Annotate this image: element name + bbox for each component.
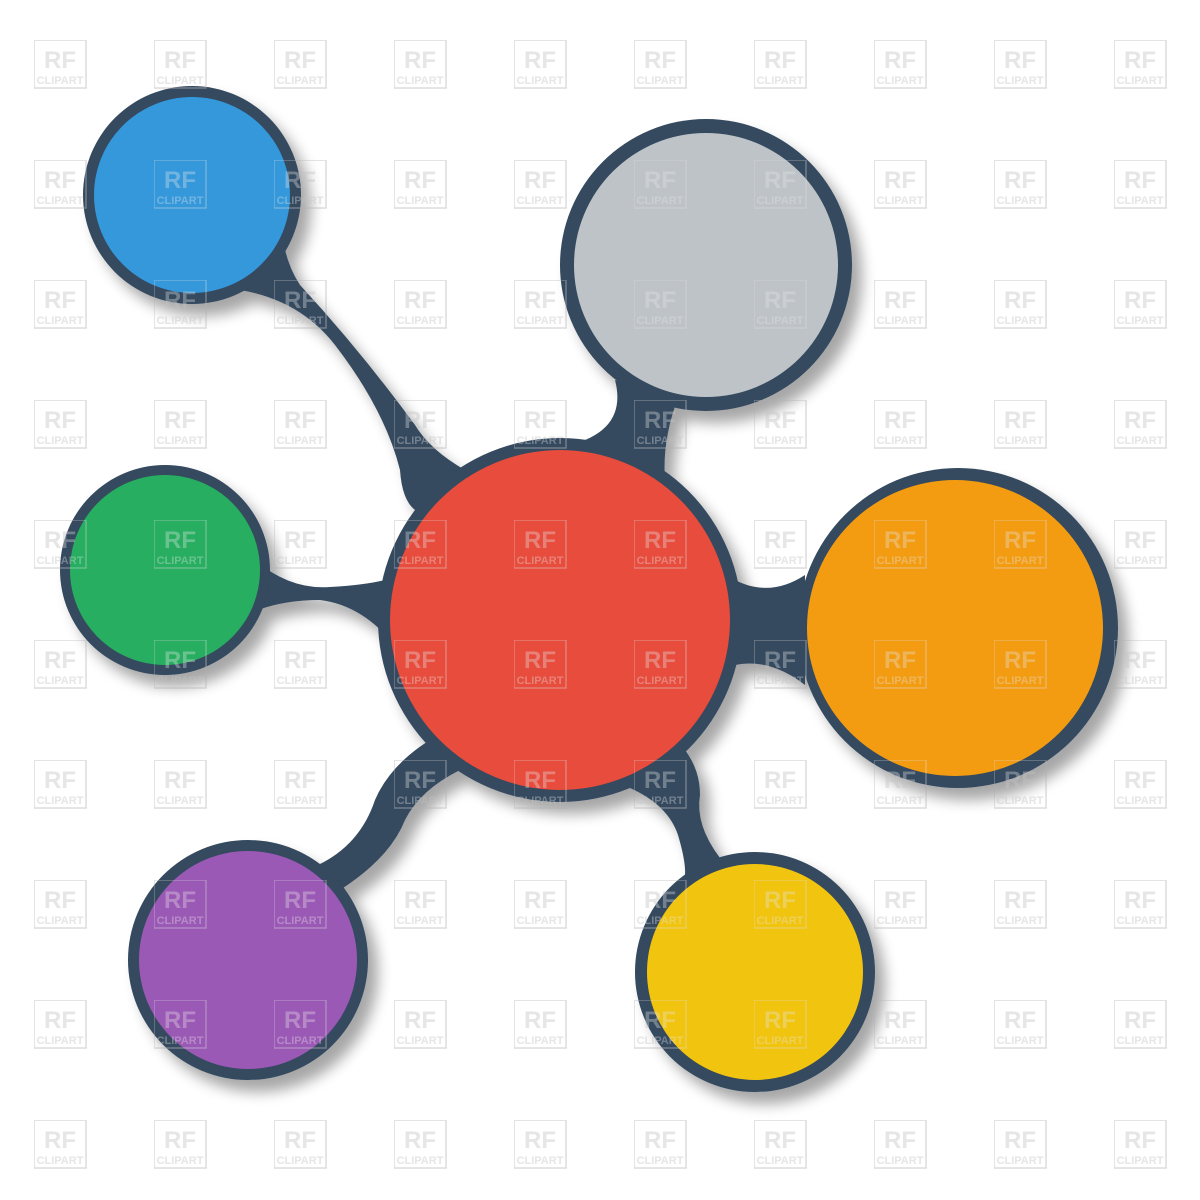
dark rings and connectors	[60, 86, 1118, 1092]
node: blue	[94, 97, 290, 293]
node: green	[70, 475, 260, 665]
node: purple	[139, 851, 357, 1069]
node: orange	[807, 480, 1103, 776]
node: gray	[574, 133, 838, 397]
diagram: metaball network	[60, 86, 1118, 1092]
node: red center	[390, 450, 730, 790]
node: yellow	[647, 864, 863, 1080]
